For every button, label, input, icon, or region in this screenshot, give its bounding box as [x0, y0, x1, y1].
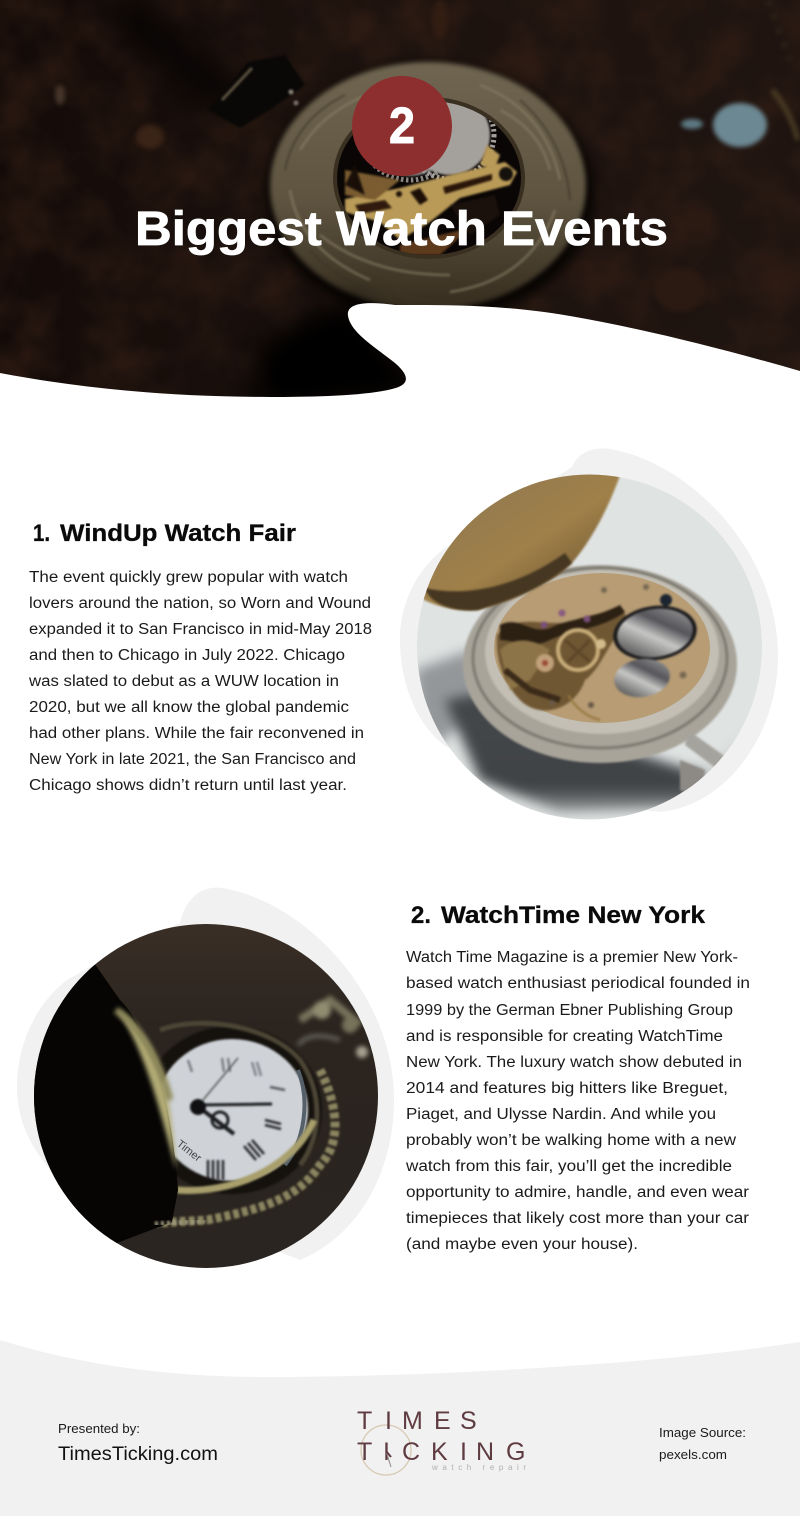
number badge: 2 [389, 97, 415, 154]
section 2: WatchTime New York [405, 902, 750, 1253]
footer: image source: pexels.com [659, 1447, 727, 1462]
photo 1: open pocket watch movement [410, 470, 770, 830]
gears [399, 168, 433, 178]
footer: presented by [58, 1421, 218, 1465]
body text 2: Piaget, and Ulysse Nardin. And while you [406, 1106, 716, 1123]
logo: Times Ticking watch repair: watch repair [431, 1463, 526, 1472]
footer: presented by: TimesTicking.com [58, 1443, 218, 1465]
dark wave shadow beneath the watch [243, 290, 406, 397]
header photo: pocket watch on dark wood [0, 0, 800, 410]
logo: Times Ticking watch repair [357, 1407, 526, 1475]
body text 2: based watch enthusiast periodical founded in [406, 975, 750, 992]
body text 2: and is responsible for creating WatchTime [406, 1028, 723, 1045]
body text 2: Watch Time Magazine is a premier New York- [406, 949, 738, 966]
bezel [142, 1026, 322, 1194]
heading 1: 1. [33, 520, 50, 547]
logo: Times Ticking watch repair: TIMES [357, 1407, 477, 1435]
white wave divider with swoosh [0, 303, 800, 420]
body text 2: timepieces that likely cost more than your car [406, 1210, 749, 1227]
body text 2: watch from this fair, you’ll get the incredible [405, 1158, 732, 1175]
body text 1: expanded it to San Francisco in mid-May 2018 [29, 621, 372, 638]
body text 1: Chicago shows didn’t return until last year. [29, 777, 347, 794]
chain [298, 1000, 368, 1058]
shadow [418, 646, 726, 819]
heading 1: WindUp Watch Fair [60, 520, 296, 547]
title: Biggest Watch Events [135, 203, 668, 256]
open lid [34, 964, 178, 1243]
body text 2: 2014 and features big hitters like Breguet, [406, 1080, 728, 1097]
body text 1: 2020, but we all know the global pandemic [29, 699, 349, 716]
hands [190, 1058, 272, 1134]
body text 2: opportunity to admire, handle, and even wear [406, 1184, 749, 1201]
body text 1 [28, 569, 372, 794]
gold bridge [345, 145, 517, 255]
footer band [0, 1340, 800, 1516]
blob behind photo 1 [400, 448, 778, 812]
body text 1: The event quickly grew popular with watch [29, 569, 348, 586]
dial [156, 1039, 308, 1181]
lid [410, 470, 622, 610]
body text 1: and then to Chicago in July 2022. Chicago [29, 647, 345, 664]
dial text: Timer [174, 1138, 204, 1165]
logo: Times Ticking watch repair: TICKING [357, 1438, 525, 1466]
dark streak and crown [94, 0, 237, 118]
number badge [352, 76, 452, 176]
body text 1: had other plans. While the fair reconvened in [29, 725, 364, 742]
body text 1: New York in late 2021, the San Francisco and [29, 751, 356, 768]
body text 2: 1999 by the German Ebner Publishing Group [406, 1002, 733, 1019]
watch case [265, 62, 595, 323]
footer: image source [659, 1425, 746, 1462]
movement [497, 605, 628, 710]
section 1: WindUp Watch Fair [28, 520, 372, 794]
footer: presented by: Presented by: [58, 1421, 140, 1436]
body text 2: probably won’t be walking home with a new [406, 1132, 737, 1149]
body text 2: (and maybe even your house). [406, 1236, 638, 1253]
body text 1: was slated to debut as a WUW location in [28, 673, 339, 690]
body text 2 [405, 949, 750, 1253]
case [463, 565, 737, 763]
heading 2: WatchTime New York [441, 902, 706, 929]
footer: image source: Image Source: [659, 1425, 746, 1440]
body text 2: New York. The luxury watch show debuted in [406, 1054, 742, 1071]
heading 2: 2. [411, 902, 431, 929]
blob behind photo 2 [17, 888, 394, 1260]
photo 2: pocket watch with white dial [34, 924, 378, 1268]
ornament edge [157, 1070, 335, 1223]
body text 1: lovers around the nation, so Worn and Wound [29, 595, 371, 612]
numerals [188, 1058, 285, 1180]
